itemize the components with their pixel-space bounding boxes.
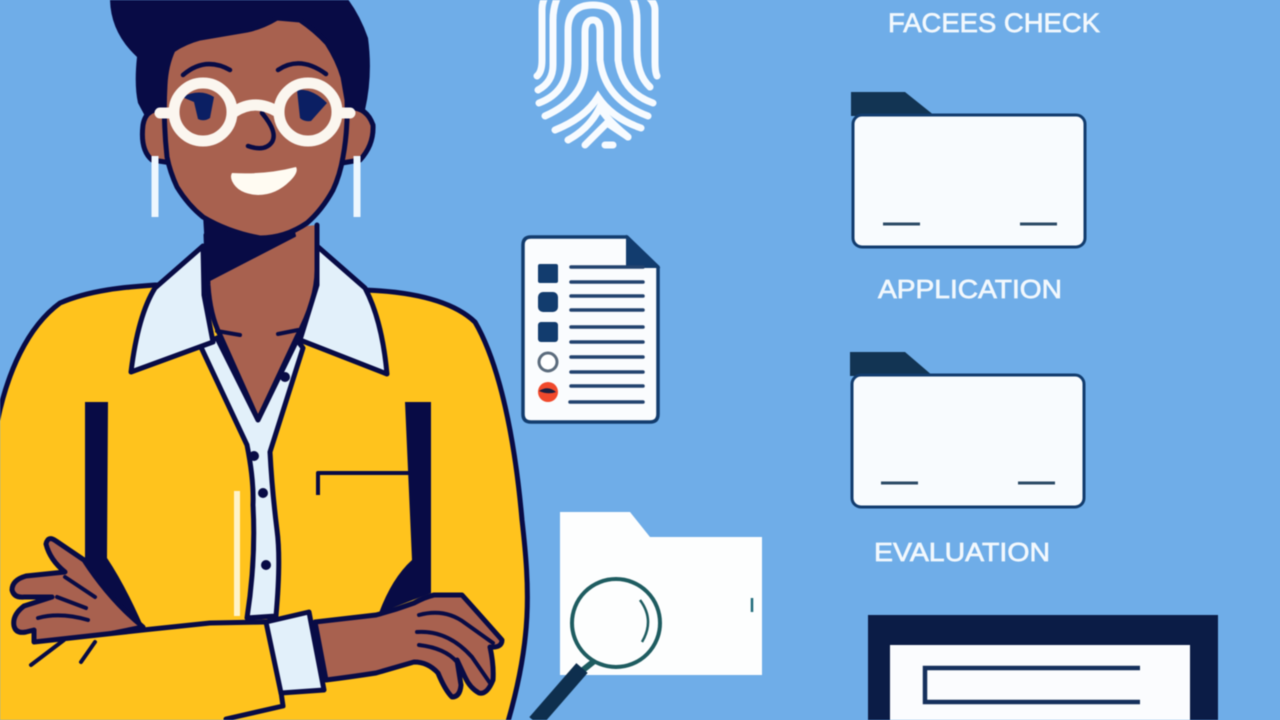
mouth	[231, 167, 297, 195]
neck	[206, 225, 317, 420]
ears	[142, 108, 373, 163]
nose	[248, 113, 274, 148]
folded sleeve	[0, 622, 283, 720]
icon: computer monitor	[868, 615, 1218, 720]
shirt buttons	[249, 372, 290, 570]
icon: application folder	[851, 92, 1085, 247]
left hand finger lines	[38, 577, 95, 620]
checklist markers	[538, 264, 558, 283]
face	[164, 18, 347, 238]
neck creases	[217, 330, 298, 335]
sleeve outline	[34, 622, 283, 719]
right hand finger lines	[417, 613, 493, 683]
right hand and forearm	[315, 595, 502, 697]
jacket straps and shadows	[85, 402, 431, 626]
neck shadow	[204, 215, 295, 281]
document fold	[627, 237, 658, 267]
glasses	[160, 83, 350, 141]
pocket line	[318, 473, 412, 495]
checklist lines	[570, 267, 643, 402]
illustration: woman with glasses and yellow jacket	[0, 0, 527, 720]
jacket	[0, 285, 527, 720]
eyebrows	[183, 63, 326, 75]
label: evaluation: EVALUATION	[874, 537, 1050, 567]
jacket highlight	[234, 491, 240, 616]
eyes	[182, 90, 327, 121]
icon: evaluation folder	[850, 352, 1084, 507]
label: application: APPLICATION	[878, 274, 1062, 304]
collar left	[131, 246, 213, 372]
icon: checklist document	[523, 237, 658, 422]
earrings	[155, 156, 357, 217]
magnifier	[535, 579, 660, 720]
cuff	[266, 612, 324, 693]
icon: folder with magnifier	[535, 512, 762, 720]
hair	[110, 0, 370, 118]
icon: fingerprint	[537, 0, 657, 145]
sleeve dashes	[31, 640, 95, 665]
heading: faces check: FACEES CHECK	[888, 8, 1100, 38]
shirt placket	[200, 338, 303, 618]
left hand	[12, 539, 143, 645]
collar right	[300, 246, 387, 374]
